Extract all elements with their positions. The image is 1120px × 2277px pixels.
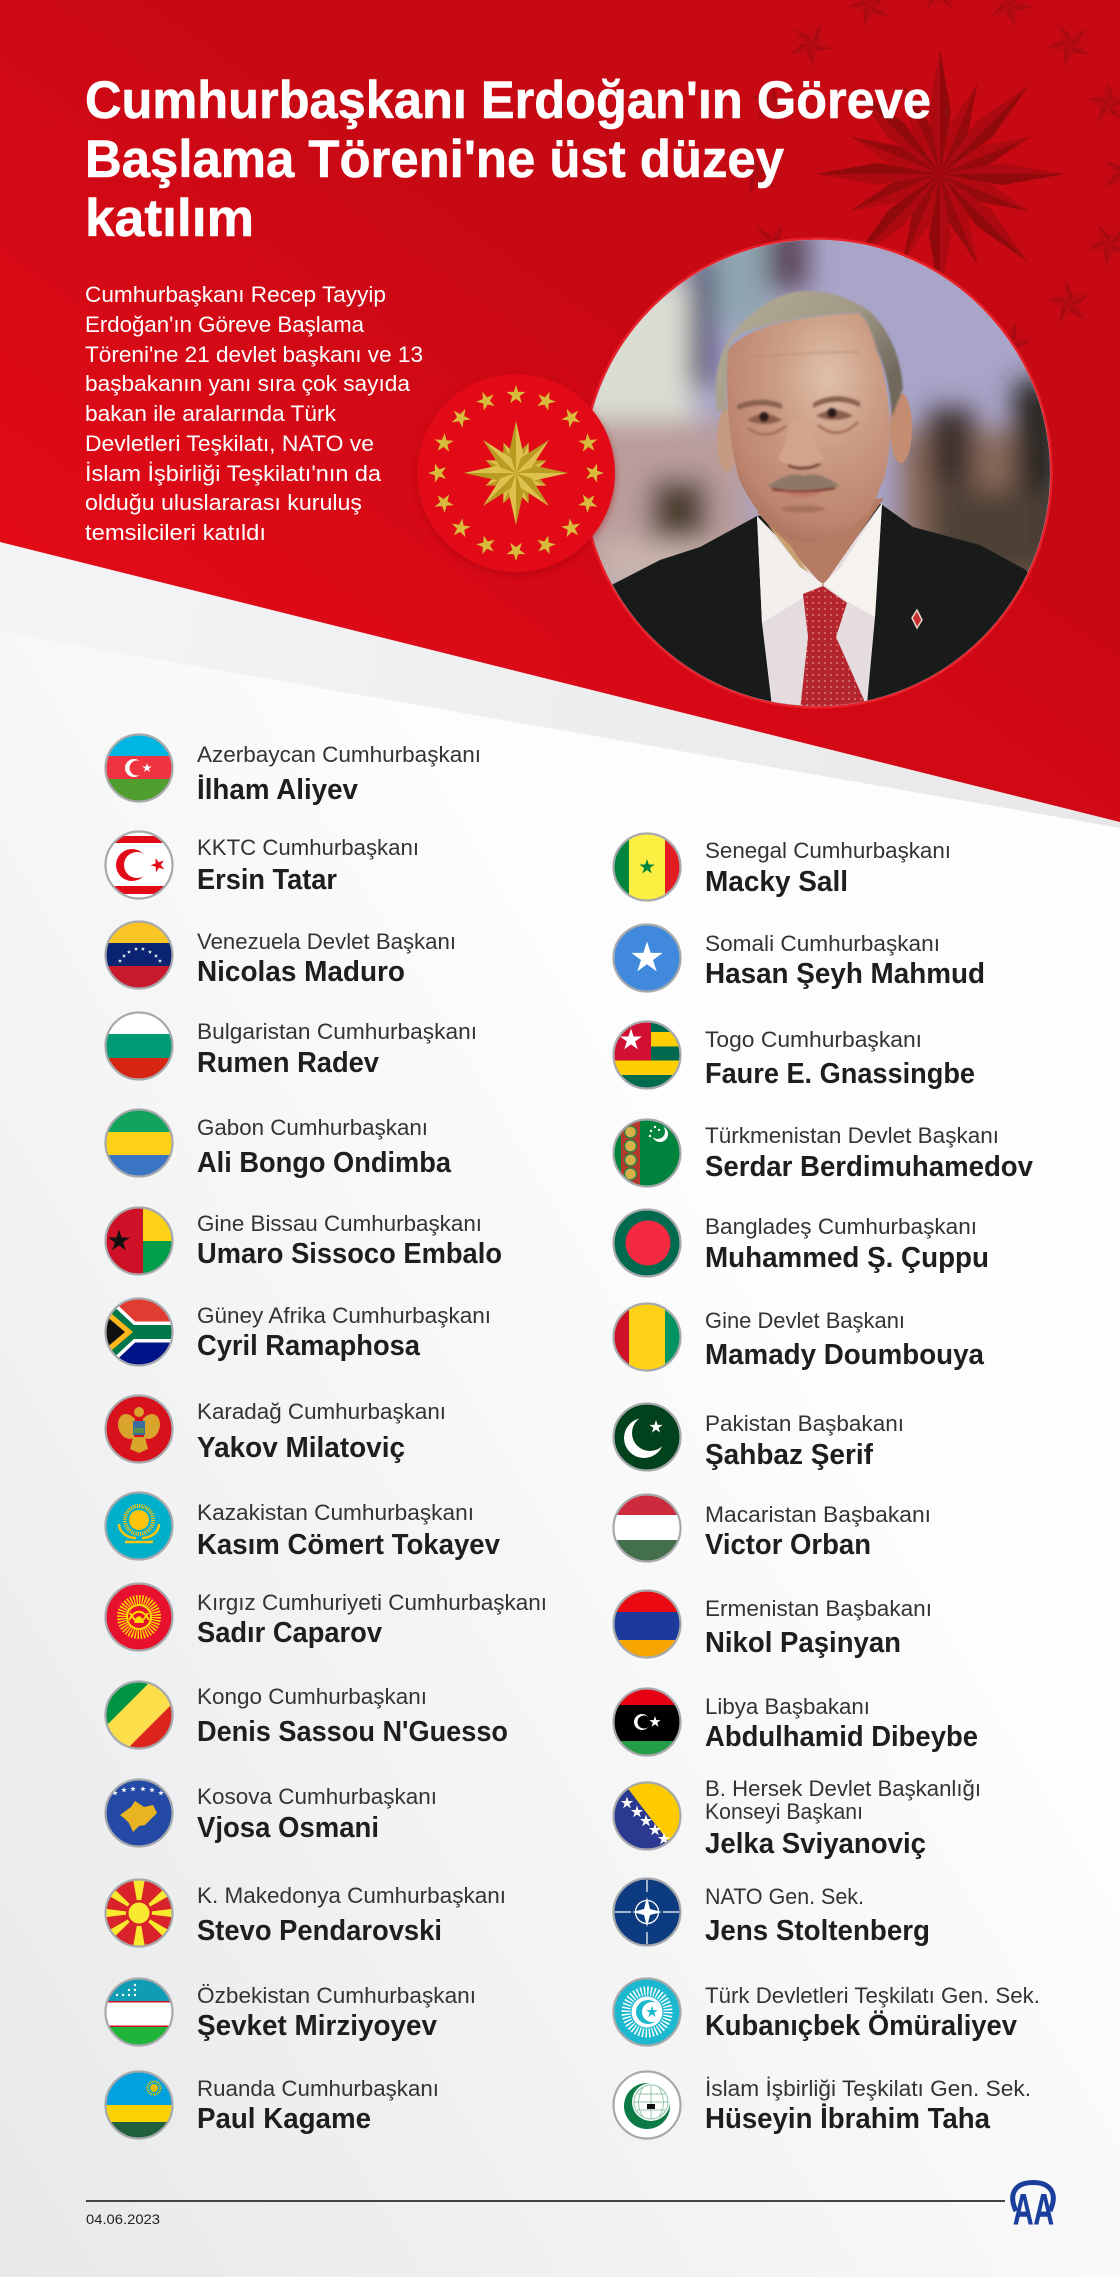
row: K. Makedonya [104, 1878, 504, 1948]
role: Kırgız Cumhuriyeti Cumhurbaşkanı [197, 1590, 547, 1615]
name: Denis Sassou N'Guesso [197, 1716, 508, 1748]
row: Libya [613, 1688, 978, 1756]
row: Togo [613, 1021, 975, 1090]
role: Güney Afrika Cumhurbaşkanı [197, 1303, 491, 1328]
red facet shading [560, 300, 1120, 822]
name: Mamady Doumbouya [705, 1339, 985, 1371]
role: İslam İşbirliği Teşkilatı Gen. Sek. [705, 2076, 1031, 2101]
name: Yakov Milatoviç [197, 1432, 405, 1464]
name: Cyril Ramaphosa [197, 1330, 421, 1362]
row: Bangladeş [613, 1209, 989, 1277]
row: KKTC [105, 831, 419, 899]
row: Bulgaristan [105, 1012, 477, 1080]
row: Macaristan [613, 1494, 931, 1562]
intro text block: başbakanın yanı sıra çok sayıda [85, 371, 411, 396]
name: Hüseyin İbrahim Taha [705, 2103, 991, 2135]
logo: AA: AA [1013, 2185, 1054, 2234]
role: Somali Cumhurbaşkanı [705, 931, 940, 956]
name: Macky Sall [705, 866, 848, 898]
flag: Libya [613, 1688, 681, 1756]
role: Özbekistan Cumhurbaşkanı [197, 1983, 476, 2008]
flag: Gabon [105, 1109, 173, 1177]
role: Gine Bissau Cumhurbaşkanı [197, 1211, 482, 1236]
role: KKTC Cumhurbaşkanı [197, 835, 419, 860]
title [85, 71, 931, 248]
row: Güney Afrika [97, 1298, 491, 1366]
flag: Gine [613, 1303, 681, 1371]
emblem: Presidency seal [417, 374, 615, 575]
row: Özbekistan [105, 1978, 476, 2046]
flag: Bulgaristan [105, 1012, 173, 1080]
role: Bulgaristan Cumhurbaşkanı [197, 1019, 477, 1044]
role: Kongo Cumhurbaşkanı [197, 1684, 427, 1709]
row: Gine Bissau [105, 1207, 502, 1275]
row: Kırgız [105, 1583, 547, 1651]
row: Venezuela [105, 921, 456, 989]
name: Rumen Radev [197, 1047, 379, 1079]
role: Togo Cumhurbaşkanı [705, 1027, 922, 1052]
intro text block: Töreni'ne 21 devlet başkanı ve 13 [85, 342, 423, 367]
row: İslam İşbirliği Teşkilatı [613, 2071, 1031, 2139]
facial features [737, 352, 860, 512]
name: Şevket Mirziyoyev [197, 2010, 437, 2042]
flag: Bangladeş [613, 1209, 681, 1277]
footer rule [86, 2200, 1005, 2202]
role: Karadağ Cumhurbaşkanı [197, 1399, 446, 1424]
role second line: Konseyi Başkanı [705, 1799, 863, 1824]
flag: KKTC [105, 831, 173, 899]
title: katılım [85, 189, 254, 248]
flag: Kongo [105, 1681, 173, 1749]
role: Kazakistan Cumhurbaşkanı [197, 1500, 474, 1525]
intro text block: Devletleri Teşkilatı, NATO ve [85, 431, 374, 456]
flag: Kırgız [105, 1583, 173, 1651]
name: Jens Stoltenberg [705, 1915, 930, 1947]
row: Kazakistan [105, 1492, 500, 1561]
name: Stevo Pendarovski [197, 1915, 442, 1947]
flag: Kosova [105, 1779, 173, 1847]
flag: Togo [613, 1021, 681, 1089]
role: Gabon Cumhurbaşkanı [197, 1115, 428, 1140]
role: Türkmenistan Devlet Başkanı [705, 1123, 999, 1148]
name: Victor Orban [705, 1529, 871, 1561]
row: Somali [613, 924, 985, 992]
role: Gine Devlet Başkanı [705, 1308, 905, 1333]
row: Bosna Hersek [613, 1776, 981, 1860]
row: Gabon [105, 1109, 452, 1179]
row: Ermenistan [613, 1590, 932, 1659]
intro text block: Erdoğan'ın Göreve Başlama [85, 312, 365, 337]
name: Jelka Sviyanoviç [705, 1828, 926, 1860]
name: Kasım Cömert Tokayev [197, 1529, 500, 1561]
name: Nicolas Maduro [197, 956, 405, 988]
name: Sadır Caparov [197, 1617, 382, 1649]
face [727, 313, 890, 542]
ears [717, 408, 734, 472]
role: Macaristan Başbakanı [705, 1502, 931, 1527]
flag: Bosna Hersek [613, 1782, 681, 1850]
role: Azerbaycan Cumhurbaşkanı [197, 742, 481, 767]
intro text block: İslam İşbirliği Teşkilatı'nın da [85, 461, 382, 486]
name: Muhammed Ş. Çuppu [705, 1242, 989, 1274]
row: Ruanda [105, 2071, 439, 2139]
row: Gine [613, 1303, 985, 1371]
grey diagonal band [0, 542, 1120, 828]
flag: NATO [613, 1878, 681, 1946]
name: Hasan Şeyh Mahmud [705, 958, 985, 990]
flag: Macaristan [613, 1494, 681, 1562]
title: Cumhurbaşkanı Erdoğan'ın Göreve [85, 71, 931, 130]
role: Libya Başbakanı [705, 1694, 870, 1719]
role: Kosova Cumhurbaşkanı [197, 1784, 437, 1809]
role: Pakistan Başbakanı [705, 1411, 904, 1436]
flag: İslam İşbirliği Teşkilatı [613, 2071, 681, 2139]
flag: Somali [613, 924, 681, 992]
role: Ermenistan Başbakanı [705, 1596, 932, 1621]
flag: Ermenistan [613, 1590, 681, 1658]
flag: Ruanda [105, 2071, 173, 2139]
portrait photo circle [590, 237, 1053, 709]
row: Azerbaycan [105, 734, 481, 806]
intro text block: temsilcileri katıldı [85, 520, 266, 545]
flag: Karadağ [105, 1395, 173, 1463]
logo: AA [1013, 2182, 1054, 2234]
name: Kubanıçbek Ömüraliyev [705, 2010, 1017, 2042]
name: Abdulhamid Dibeybe [705, 1721, 978, 1753]
row: Senegal [613, 833, 951, 901]
name: Ersin Tatar [197, 864, 337, 896]
flag: Kazakistan [105, 1492, 173, 1560]
role: Senegal Cumhurbaşkanı [705, 838, 951, 863]
name: Serdar Berdimuhamedov [705, 1151, 1033, 1183]
flag: Türk Devletleri Teşkilatı [613, 1978, 681, 2046]
row: Kosova [105, 1779, 437, 1847]
flag: K. Makedonya [104, 1878, 174, 1948]
intro text block: olduğu uluslararası kuruluş [85, 490, 362, 515]
title: Başlama Töreni'ne üst düzey [85, 130, 785, 189]
role: Türk Devletleri Teşkilatı Gen. Sek. [705, 1983, 1040, 2008]
red header panel [0, 0, 1120, 822]
intro text block: bakan ile aralarında Türk [85, 401, 337, 426]
row: Türkmenistan [613, 1119, 1033, 1187]
name: Paul Kagame [197, 2103, 371, 2135]
row: Pakistan [613, 1403, 904, 1471]
row: Kongo [105, 1681, 508, 1749]
flag: Güney Afrika [104, 1297, 174, 1367]
intro text block: Cumhurbaşkanı Recep Tayyip [85, 282, 386, 307]
flag: Pakistan [613, 1403, 681, 1471]
name: Vjosa Osmani [197, 1812, 379, 1844]
flag: Venezuela [105, 921, 173, 989]
watermark: presidential sun and stars [734, 0, 1120, 373]
role: B. Hersek Devlet Başkanlığı [705, 1776, 981, 1801]
name: Ali Bongo Ondimba [197, 1147, 452, 1179]
row: Türk Devletleri Teşkilatı [613, 1978, 1040, 2046]
flag: Özbekistan [105, 1978, 173, 2046]
name: Şahbaz Şerif [705, 1439, 873, 1471]
role: Venezuela Devlet Başkanı [197, 929, 456, 954]
flag: Azerbaycan [105, 734, 173, 802]
flag: Türkmenistan [613, 1119, 681, 1187]
name: Faure E. Gnassingbe [705, 1058, 975, 1090]
role: NATO Gen. Sek. [705, 1884, 864, 1909]
name: Umaro Sissoco Embalo [197, 1238, 502, 1270]
row: Karadağ [105, 1395, 446, 1464]
role: Bangladeş Cumhurbaşkanı [705, 1214, 977, 1239]
row: NATO [613, 1878, 930, 1947]
name: Nikol Paşinyan [705, 1627, 901, 1659]
date: 04.06.2023 [86, 2211, 160, 2227]
role: K. Makedonya Cumhurbaşkanı [197, 1883, 506, 1908]
flag: Senegal [613, 833, 681, 901]
name: İlham Aliyev [197, 774, 358, 806]
intro text block [85, 282, 423, 545]
role: Ruanda Cumhurbaşkanı [197, 2076, 439, 2101]
hair [716, 291, 903, 417]
flag: Gine Bissau [105, 1207, 173, 1275]
